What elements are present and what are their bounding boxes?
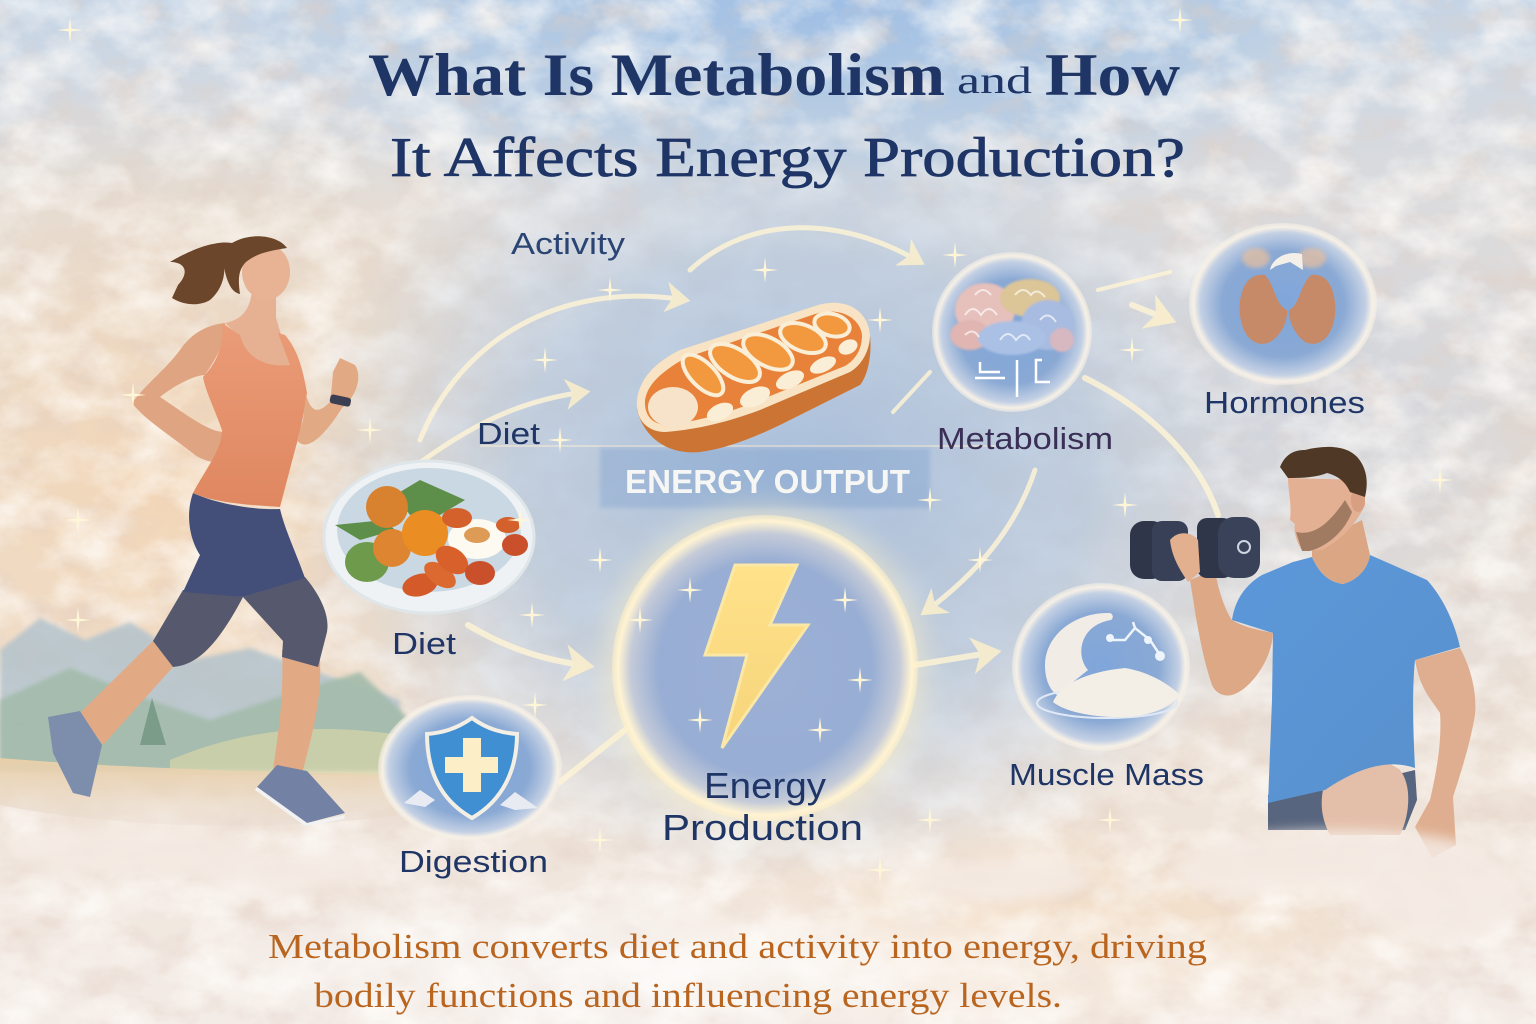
title: and bbox=[957, 60, 1032, 102]
fist bbox=[1170, 533, 1200, 582]
label: Digestion: Digestion bbox=[399, 844, 548, 879]
back leg lower tights bbox=[153, 590, 243, 667]
back leg skin bbox=[80, 641, 173, 745]
beard bbox=[1296, 500, 1352, 551]
label: Muscle Mass: Muscle Mass bbox=[1009, 757, 1204, 792]
leggings upper bbox=[183, 493, 305, 597]
label: Diet (upper): Diet bbox=[477, 416, 540, 451]
shorts bbox=[1268, 770, 1417, 830]
title: How bbox=[1045, 42, 1181, 108]
icon: digestion shield circle bbox=[378, 695, 562, 841]
tank top bbox=[193, 323, 307, 507]
label: Metabolism: Metabolism bbox=[937, 421, 1113, 456]
caption: bodily functions and influencing energy levels. bbox=[314, 976, 1062, 1015]
label: Energy Production bbox=[662, 765, 863, 848]
figure: man with dumbbell bbox=[1130, 447, 1475, 858]
icon: hormones circle bbox=[1189, 223, 1377, 385]
back shoe bbox=[48, 711, 102, 797]
label: Diet (lower): Diet bbox=[392, 626, 456, 661]
face bbox=[242, 244, 290, 300]
hair with ponytail bbox=[170, 236, 287, 304]
head bbox=[1288, 478, 1365, 551]
label band: Energy Output: ENERGY OUTPUT bbox=[625, 463, 910, 500]
front leg skin bbox=[273, 650, 320, 770]
wristband bbox=[329, 394, 352, 407]
sparkles bbox=[57, 7, 1453, 883]
title: What Is Metabolism bbox=[368, 42, 945, 108]
front leg lower tights bbox=[243, 577, 328, 667]
label: Energy Production: Energy bbox=[704, 765, 826, 806]
mitochondrion bbox=[637, 303, 871, 452]
shirt bbox=[1232, 555, 1460, 803]
neck bbox=[1312, 520, 1370, 584]
caption: Metabolism converts diet and activity into energy, driving bbox=[268, 927, 1207, 966]
title: It Affects Energy Production? bbox=[390, 127, 1185, 189]
label band: Energy Output bbox=[480, 446, 1000, 508]
icon: energy production circle bbox=[605, 508, 925, 828]
flow arrows bbox=[410, 228, 1218, 782]
label: Activity: Activity bbox=[511, 226, 626, 261]
foreground clouds bbox=[10, 826, 1525, 940]
knee bbox=[1322, 761, 1408, 835]
icon: brain circle bbox=[932, 252, 1092, 412]
rear arm bbox=[132, 323, 237, 462]
hair bbox=[1280, 447, 1367, 497]
ear bbox=[1351, 488, 1365, 512]
title bbox=[368, 42, 1185, 189]
label: Energy Production: Production bbox=[662, 807, 863, 848]
chest skin and neck bbox=[225, 290, 290, 368]
front shoe bbox=[257, 765, 345, 823]
label: Hormones: Hormones bbox=[1204, 385, 1365, 420]
figure: woman running bbox=[48, 236, 358, 826]
dumbbell bbox=[1130, 517, 1260, 581]
icon: muscle mass circle bbox=[1012, 583, 1190, 751]
far arm bbox=[1415, 648, 1475, 858]
front arm bbox=[297, 358, 358, 445]
icon: plate of food bbox=[324, 461, 534, 613]
lifting arm bbox=[1190, 570, 1273, 695]
caption bbox=[268, 927, 1207, 1015]
landscape: mountains and path bbox=[0, 618, 410, 826]
